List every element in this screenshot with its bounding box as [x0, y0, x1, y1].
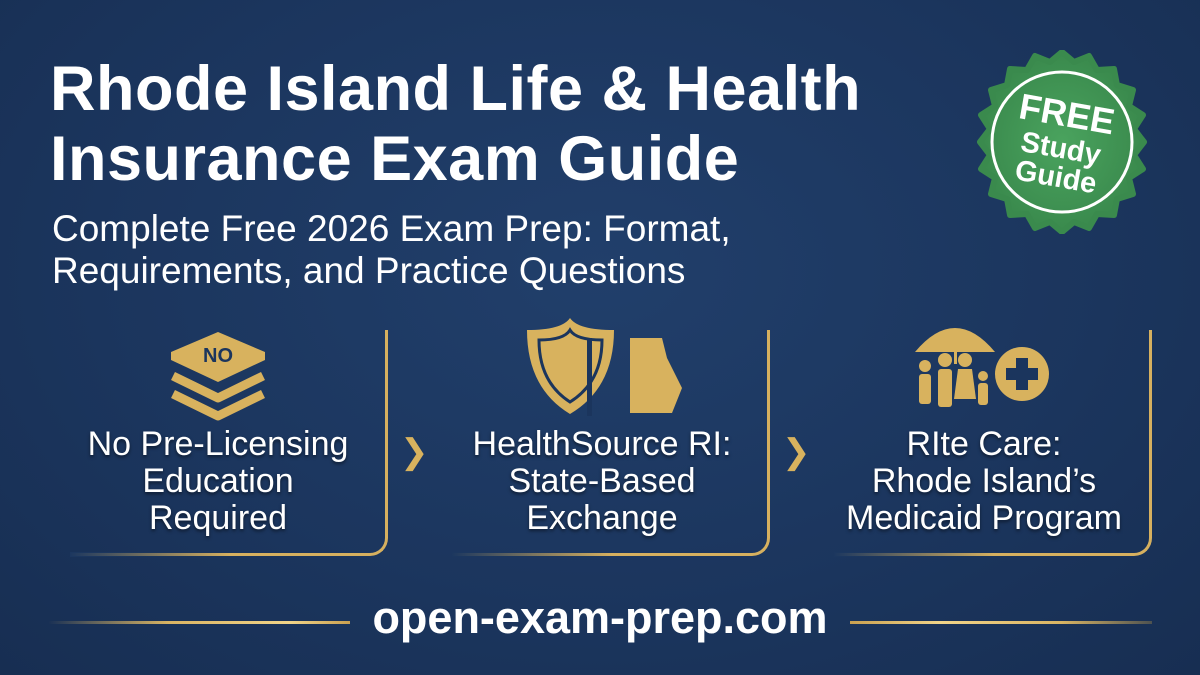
- arrow 2: ❯: [782, 433, 810, 471]
- panel 2: healthsource: [459, 318, 770, 556]
- panel 3 text: Rhode Island’s: [872, 462, 1096, 500]
- panel 1 text: Education: [142, 462, 294, 500]
- badge: free study guide: [977, 50, 1147, 234]
- panel 3 text: [846, 425, 1122, 540]
- panel 1 text: No Pre-Licensing: [88, 425, 348, 463]
- footer lines: [48, 621, 350, 624]
- panel 3 text: Medicaid Program: [846, 499, 1122, 537]
- badge: free study guide: FREE: [1016, 85, 1118, 142]
- icon: books NO: NO: [203, 345, 233, 367]
- panel 2 text: Exchange: [526, 499, 678, 537]
- panel 2 text: State-Based: [508, 462, 696, 500]
- icon: books NO: [171, 332, 265, 420]
- title: Insurance Exam Guide: [50, 124, 739, 194]
- panel 1 text: [88, 425, 348, 539]
- icon: shield and map: [527, 318, 682, 416]
- panel 2 text: HealthSource RI:: [473, 425, 731, 463]
- panel 2 frame: [452, 330, 770, 556]
- subtitle: Requirements, and Practice Questions: [52, 250, 685, 291]
- panel 3 text: RIte Care:: [907, 425, 1061, 463]
- title: Rhode Island Life & Health: [50, 54, 861, 124]
- panel 1 frame: [70, 330, 388, 556]
- badge: free study guide: Study: [1018, 126, 1103, 172]
- title: [50, 54, 861, 194]
- footer url: open-exam-prep.com: [372, 592, 828, 643]
- panel 1 text: Required: [149, 499, 287, 537]
- panel 1: no pre-licensing: [74, 330, 388, 556]
- panel 2 text: [473, 425, 731, 540]
- subtitle: Complete Free 2026 Exam Prep: Format,: [52, 208, 731, 249]
- subtitle: [52, 208, 731, 291]
- badge: free study guide: Guide: [1013, 155, 1099, 200]
- icon: umbrella family plus: [915, 328, 1049, 407]
- arrow 1: ❯: [400, 433, 428, 471]
- panel 3 frame: [834, 330, 1152, 556]
- panel 3: rite care: [840, 328, 1152, 556]
